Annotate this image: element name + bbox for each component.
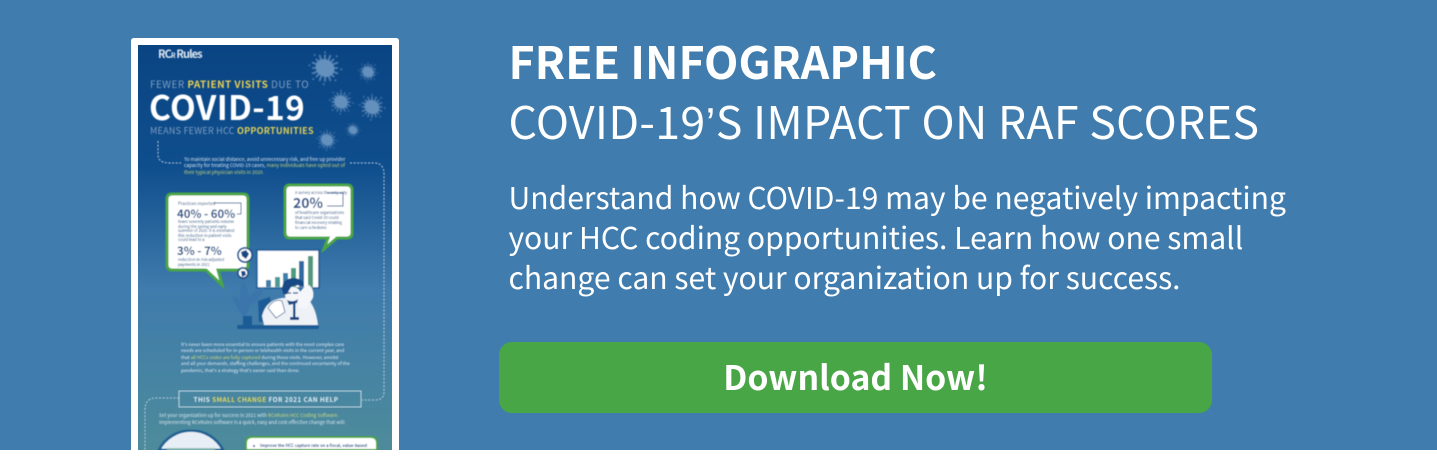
download button: Download Now! xyxy=(723,351,988,400)
closing paragraph: Implementing RCxRules software is a quick, easy and cost-effective change that will: xyxy=(159,419,346,426)
body paragraph xyxy=(181,341,350,374)
globes xyxy=(238,248,252,278)
speech bubble: 20%: that said Covid-19 could xyxy=(295,215,339,221)
intro paragraph: their typical physician visits in 2020. xyxy=(184,169,264,176)
body paragraph: and all your demands, staffing challenges, and the continued uncertainty of the xyxy=(181,360,350,367)
dashed connector lines xyxy=(145,141,384,450)
body paragraph: pandemic, that's a strategy that's easier said than done. xyxy=(181,367,300,374)
heading line: free infographic: FREE INFOGRAPHIC xyxy=(508,27,937,92)
circle badge xyxy=(159,430,223,450)
infographic thumbnail xyxy=(131,38,399,450)
thumbnail headline: FEWER PATIENT VISITS DUE TO xyxy=(150,76,309,91)
speech bubble: 40% - 60%: reduction in risk-adjusted xyxy=(178,257,225,263)
speech bubble: 40% - 60%: this reduction in patient visits xyxy=(178,233,232,239)
illustration: doctor with chart xyxy=(233,248,319,329)
heading line: title: COVID-19’S IMPACT ON RAF SCORES xyxy=(508,87,1259,152)
thumbnail headline: MEANS FEWER HCC OPPORTUNITIES xyxy=(150,124,314,137)
speech bubble: 40% - 60%: summer of 2020. It is estimated xyxy=(178,228,235,234)
body paragraph: It's never been more essential to ensure patients with the most complex care xyxy=(181,341,345,348)
closing paragraph: Set your organization up for success in 2021 with RCxRules HCC Coding Software. xyxy=(159,412,339,419)
speech bubble: 20% xyxy=(285,185,352,249)
speech bubble: 20%: of healthcare organizations xyxy=(295,210,344,216)
download button xyxy=(499,342,1212,413)
chart panel xyxy=(257,250,319,288)
thumbnail headline: COVID-19 xyxy=(149,81,305,130)
thumbnail white frame xyxy=(131,38,399,450)
intro paragraph: capacity for treating COVID-19 cases, many individuals have opted out of xyxy=(184,162,345,169)
person xyxy=(237,278,319,329)
speech bubble: 20%: to care schedules xyxy=(295,225,327,231)
description: your HCC coding opportunities. Learn how one small xyxy=(508,214,1243,258)
closing paragraph xyxy=(159,412,346,426)
heading xyxy=(508,27,1259,152)
body paragraph: that all HCCs codes are fully captured during those visits. However, amidst xyxy=(181,354,339,361)
speech bubble: 40% - 60%: Practices reported xyxy=(178,200,216,207)
speech bubble: 20%: A survey across the only only xyxy=(295,190,347,196)
description xyxy=(508,174,1286,298)
intro paragraph xyxy=(184,156,345,176)
description: Understand how COVID-19 may be negatively impacting xyxy=(508,174,1286,218)
speech bubble: 40% - 60%: 3% - 7% xyxy=(177,243,222,259)
benefits card xyxy=(246,437,377,450)
intro paragraph: To maintain social distance, avoid unnecessary risk, and free up provider xyxy=(184,156,345,163)
banner: this small change xyxy=(179,391,361,407)
banner: this small change: THIS SMALL CHANGE FOR 2021 CAN HELP xyxy=(193,394,339,404)
speech bubble: 40% - 60%: fewer severely patients volume xyxy=(178,219,234,225)
plant xyxy=(234,288,264,326)
speech bubble: 40% - 60%: could lead to a xyxy=(178,237,204,243)
logo: RCR Rules xyxy=(158,46,203,62)
speech bubble: 40% - 60%: during the spring and early xyxy=(178,224,227,230)
speech bubble: 20%: 20% xyxy=(293,193,324,213)
speech bubble: 20%: financial recovery relating xyxy=(295,220,343,226)
speech bubble: 40% - 60%: 40% - 60% xyxy=(177,206,235,222)
virus icons xyxy=(308,51,385,151)
body paragraph: needs are scheduled for in-person or telehealth visits in the current year, and xyxy=(181,347,344,354)
benefits card: Improve the HCC capture rate on a fiscal, value-based xyxy=(260,442,367,449)
thumbnail background xyxy=(138,45,392,450)
speech bubble: 40% - 60%: payments in 2021 xyxy=(178,262,210,268)
speech bubble: 40% - 60% xyxy=(167,194,248,285)
description: change can set your organization up for success. xyxy=(508,254,1181,298)
